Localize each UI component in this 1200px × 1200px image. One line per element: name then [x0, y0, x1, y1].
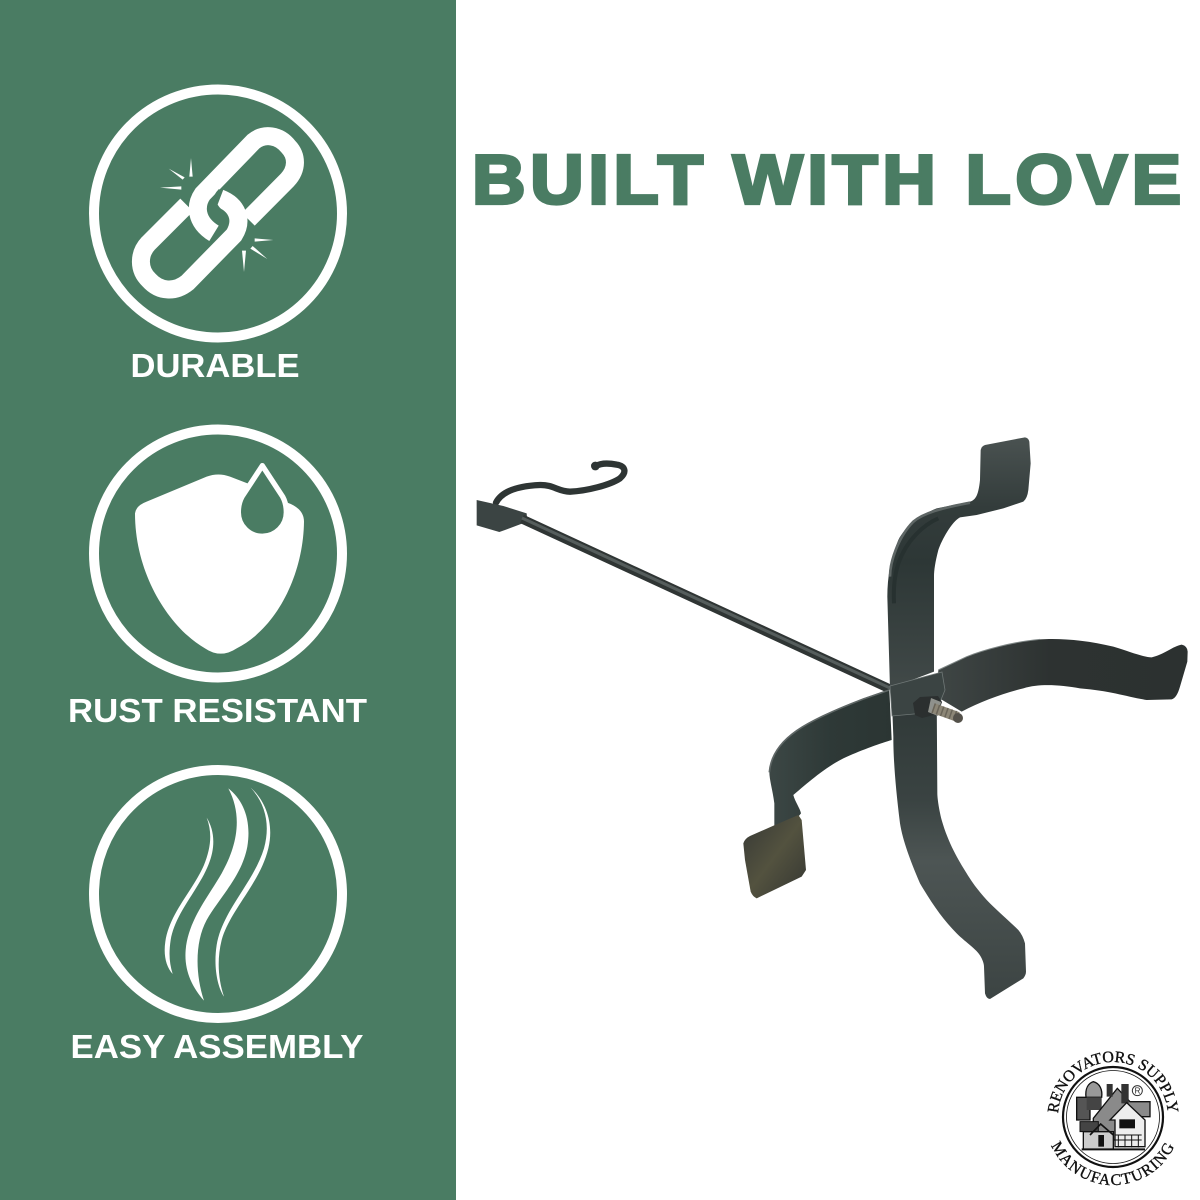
upper strap and foot: [887, 437, 1031, 688]
logo: renovators supply manufacturing: [1047, 1051, 1179, 1186]
icon: shield with water drop in circle: [94, 430, 342, 678]
logo ring: [1063, 1067, 1163, 1167]
logo arc text bottom: MANUFACTURING: [1050, 1140, 1174, 1186]
lower strap and foot: [892, 693, 1026, 999]
icon: flowing waves in circle: [94, 770, 342, 1018]
nut and bolt: [913, 696, 963, 723]
title: BUILT WITH LOVE: [472, 141, 1181, 219]
label: durable: DURABLE: [130, 347, 300, 384]
hook and handle end: [477, 462, 624, 532]
logo house drawing: [1077, 1082, 1150, 1149]
feature: easy assembly: [70, 770, 364, 1065]
right strap: [937, 639, 1188, 712]
label: easy assembly: EASY ASSEMBLY: [70, 1028, 364, 1065]
product photo: cast iron branding tool: [477, 437, 1188, 999]
icon: broken chain link in circle: [94, 90, 342, 338]
feature: rust resistant: [68, 430, 367, 729]
panel: green feature sidebar: [0, 0, 456, 1200]
feature: durable: [94, 90, 342, 384]
label: rust resistant: RUST RESISTANT: [68, 692, 367, 729]
left strap and foot: [743, 689, 892, 898]
logo registered mark: R: [1135, 1086, 1141, 1096]
central clamp plate: [890, 672, 945, 716]
left foot pad: [743, 815, 806, 898]
logo arc text top: RENOVATORS SUPPLY: [1047, 1051, 1179, 1114]
handle rod: [522, 518, 890, 689]
